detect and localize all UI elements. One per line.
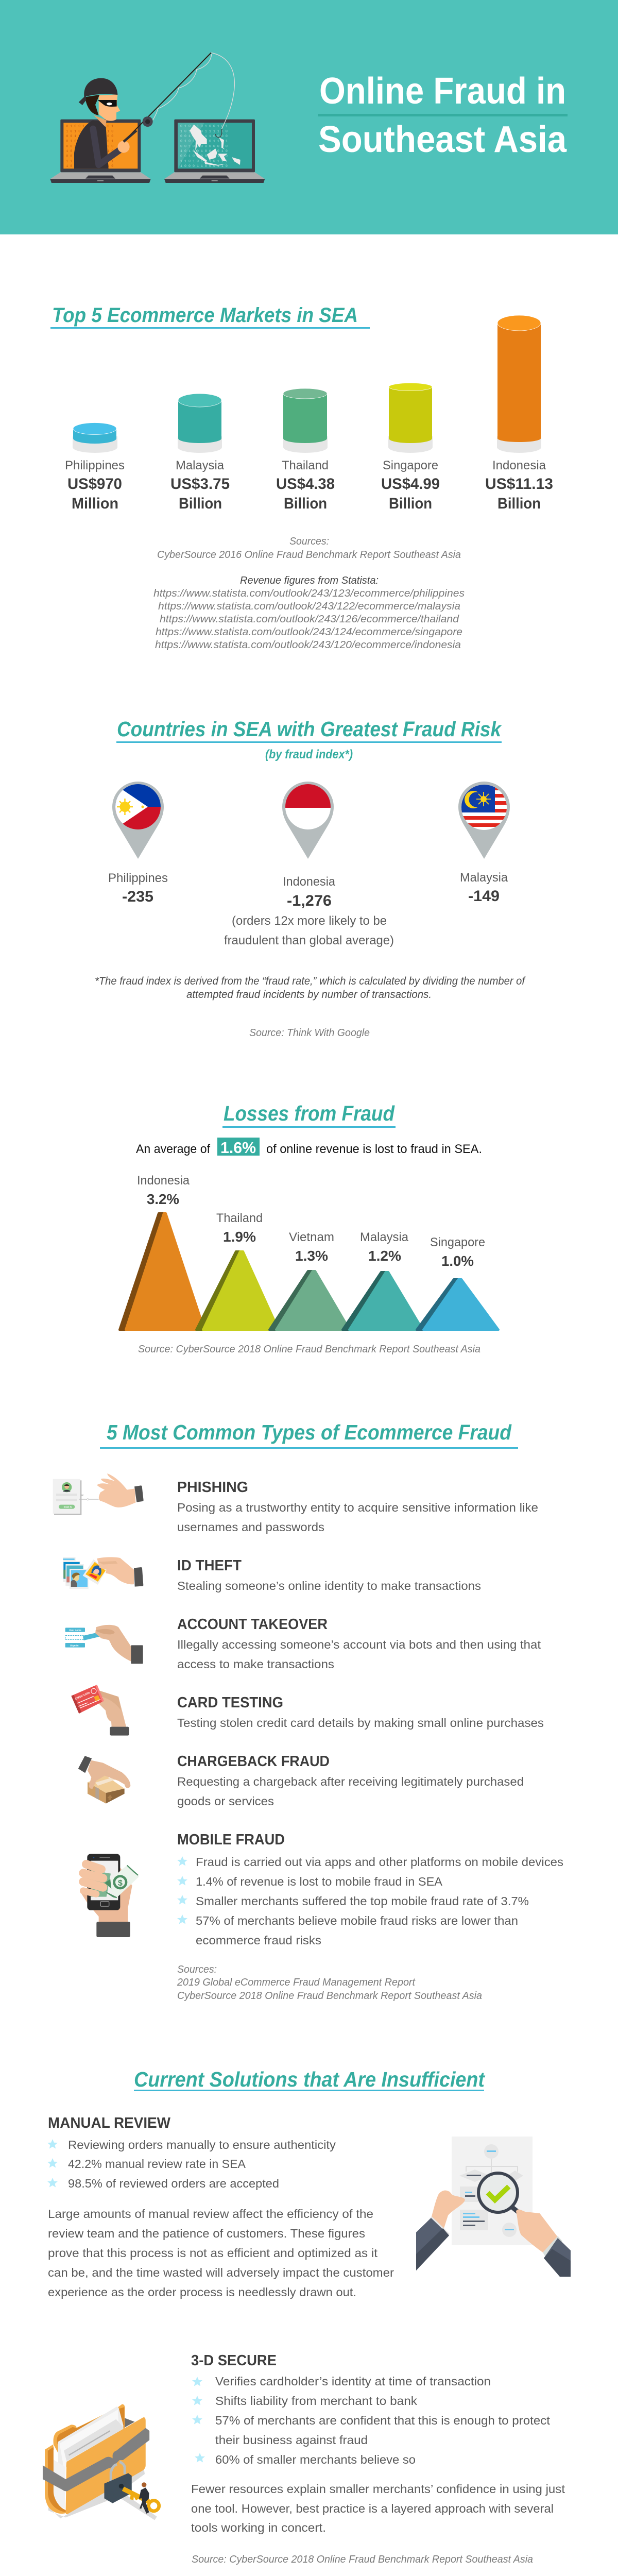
bar: Indonesia [497, 315, 541, 453]
callout: average loss: of online revenue is lost to fraud in SEA. [266, 1142, 482, 1156]
heading: Countries in SEA with Greatest Fraud Risk [117, 717, 502, 741]
bullet list: Reviewing orders manually to ensure authenticity [68, 2138, 336, 2151]
source: Source: Think With Google [249, 1027, 370, 1039]
icon: account takeover hand and login form: Sign In [70, 1644, 79, 1647]
sources: Sources: [289, 536, 329, 547]
triangle: Vietnam [269, 1271, 350, 1330]
chart labels: Billion [389, 495, 432, 512]
text: 3-D secure: 3-D SECURE [191, 2352, 277, 2369]
icon: mobile fraud hand, phone and banknote: $ [118, 1879, 123, 1888]
icon: right laptop: 0 0 1 0 0 0 1 1 0 0 0 0 [180, 134, 228, 138]
chart labels: Million [72, 495, 118, 512]
text: phishing: PHISHING [177, 1479, 248, 1496]
icon: right laptop: 1 0 0 0 1 1 0 0 0 1 1 0 [180, 164, 228, 168]
chart labels: Singapore [430, 1235, 485, 1249]
icon: card testing hand and credit card [71, 1685, 129, 1736]
text: 3-D secure [191, 2352, 565, 2565]
paragraph [48, 2207, 394, 2299]
section: countries with greatest fraud risk [95, 717, 526, 1039]
text: phishing: Posing as a trustworthy entity to acquire sensitive information like [177, 1501, 538, 1514]
chart labels: 1.2% [368, 1248, 401, 1264]
bullet list: their business against fraud [215, 2433, 368, 2447]
icon: right laptop: 0 1 0 1 0 0 1 0 1 1 0 1 [180, 139, 228, 143]
paragraph: one tool. However, best practice is a layered approach with several [191, 2502, 554, 2515]
text: manual review: MANUAL REVIEW [48, 2115, 171, 2131]
text: card testing [177, 1694, 544, 1730]
chart labels: Indonesia [492, 459, 546, 472]
icon: account takeover hand and login form [65, 1625, 143, 1664]
icon: left laptop: 0 1 0 1 0 0 0 0 1 1 0 1 [66, 139, 113, 143]
sources: https://www.statista.com/outlook/243/123/ecommerce/philippines [153, 588, 465, 599]
icon: account takeover hand and login form: User name [69, 1629, 81, 1631]
section: top 5 ecommerce markets [50, 304, 553, 651]
icon: right laptop: 0 0 1 0 0 0 0 0 0 0 0 0 [180, 144, 228, 148]
heading: Top 5 Ecommerce Markets in SEA [52, 304, 358, 327]
icon: id theft hand and cards [63, 1557, 143, 1589]
bullet list: Shifts liability from merchant to bank [215, 2394, 418, 2408]
bullet list [47, 2138, 336, 2190]
sources [153, 536, 465, 651]
sources [177, 1964, 482, 2002]
labels: fraud index: -1,276 [287, 892, 332, 909]
text: chargeback fraud: CHARGEBACK FRAUD [177, 1753, 330, 1770]
text: manual review [47, 2115, 394, 2299]
heading: (by fraud index*) [265, 748, 353, 761]
paragraph: review team and the patience of customers. These figures [48, 2227, 365, 2240]
header banner [0, 0, 618, 234]
text: chargeback fraud: goods or services [177, 1794, 274, 1808]
bar chart: cylinders [73, 315, 541, 453]
icon: right laptop: 0 1 0 0 1 0 1 0 0 1 0 1 [180, 124, 228, 128]
paragraph: can be, and the time wasted will adversely impact the customer [48, 2266, 394, 2279]
text: account takeover [177, 1616, 541, 1671]
text: mobile fraud: MOBILE FRAUD [177, 1832, 285, 1848]
text: id theft: Stealing someone’s online identity to make transactions [177, 1579, 481, 1592]
bullet list [192, 2375, 551, 2466]
text: mobile fraud [177, 1832, 563, 1947]
icon: Malaysia pin [458, 782, 510, 859]
section: losses from fraud [119, 1101, 499, 1355]
section: common types of fraud [53, 1420, 563, 2002]
callout: average loss [136, 1138, 482, 1157]
text: card testing: Testing stolen credit card details by making small online purchases [177, 1716, 544, 1730]
sources: https://www.statista.com/outlook/243/120/ecommerce/indonesia [155, 639, 461, 651]
icon: right laptop: 1 0 1 1 1 0 1 1 1 1 1 0 [180, 129, 228, 133]
sources: Sources: [177, 1964, 217, 1975]
triangle: Thailand [196, 1251, 279, 1330]
bullet list: 60% of smaller merchants believe so [215, 2453, 416, 2466]
text: chargeback fraud [177, 1753, 524, 1808]
chart labels: Indonesia [137, 1174, 190, 1188]
icon: right laptop: 0 0 1 0 0 0 0 0 1 1 0 0 [180, 154, 228, 158]
chart labels: Billion [497, 495, 541, 512]
chart labels: Vietnam [289, 1230, 334, 1244]
section: current solutions [43, 2067, 571, 2565]
labels: fraud index: fraudulent than global average) [224, 934, 394, 947]
text: phishing: usernames and passwords [177, 1520, 324, 1534]
icon: right laptop [164, 120, 265, 183]
chart labels: Billion [284, 495, 327, 512]
bullet list: Verifies cardholder’s identity at time of transaction [215, 2375, 491, 2388]
bar: Philippines [73, 422, 117, 453]
illustration: fraudster fishing through laptops [50, 53, 265, 183]
sources: CyberSource 2018 Online Fraud Benchmark Report Southeast Asia [177, 1990, 482, 2002]
text: id theft [177, 1557, 481, 1592]
icon: left laptop: 1 0 1 0 1 1 1 1 1 1 1 0 [66, 129, 113, 133]
bullet list: 42.2% manual review rate in SEA [68, 2157, 246, 2171]
heading: Losses from Fraud [224, 1101, 395, 1125]
chart labels: 1.3% [295, 1248, 328, 1264]
bullet list: 57% of merchants believe mobile fraud risks are lower than [196, 1914, 518, 1927]
sources: https://www.statista.com/outlook/243/126/ecommerce/thailand [160, 614, 459, 625]
icon: left laptop: 1 0 1 0 0 0 0 0 0 1 1 0 [66, 149, 113, 153]
callout: average loss: 1.6% [220, 1139, 256, 1157]
labels: fraud index: -235 [122, 888, 153, 905]
bullet list: 1.4% of revenue is lost to mobile fraud in SEA [196, 1875, 443, 1888]
paragraph: experience as the order process is needlessly drawn out. [48, 2285, 356, 2299]
sources: CyberSource 2016 Online Fraud Benchmark Report Southeast Asia [157, 549, 461, 561]
bar: Thailand [283, 388, 328, 453]
labels: fraud index: Malaysia [460, 871, 508, 885]
heading: Current Solutions that Are Insufficient [134, 2067, 486, 2091]
icon: left laptop: 0 1 0 0 1 0 0 1 0 1 0 1 [66, 124, 113, 128]
chart labels: US$4.99 [381, 476, 440, 493]
paragraph [191, 2482, 565, 2534]
heading: 5 Most Common Types of Ecommerce Fraud [107, 1420, 512, 1444]
map of Southeast Asia [190, 125, 241, 166]
text: card testing: CARD TESTING [177, 1694, 283, 1711]
icon: right laptop: 1 1 0 1 0 1 0 1 0 1 1 1 [180, 159, 228, 163]
bullet list: Smaller merchants suffered the top mobile fraud rate of 3.7% [196, 1894, 529, 1908]
icon: thief [74, 78, 130, 168]
icon: hands holding flowchart and magnifier [416, 2137, 571, 2277]
bullet list: 98.5% of reviewed orders are accepted [68, 2177, 279, 2190]
icon: mobile fraud hand, phone and banknote [81, 1854, 139, 1937]
icon: left laptop: 1 1 0 0 1 0 0 1 0 1 1 1 [66, 159, 113, 163]
chart labels: Malaysia [176, 459, 225, 472]
sources: 2019 Global eCommerce Fraud Management Report [177, 1977, 416, 1988]
icon: left laptop: 0 0 0 1 1 0 0 0 1 1 0 0 [66, 154, 113, 158]
icon: phishing hand and login page [53, 1473, 144, 1515]
bar: Malaysia [178, 394, 222, 453]
chart labels: 1.0% [441, 1253, 474, 1269]
heading [116, 717, 502, 761]
callout: average loss: An average of [136, 1142, 210, 1156]
chart labels: Thailand [282, 459, 329, 472]
icon: chargeback hand and parcel [79, 1756, 130, 1804]
text: chargeback fraud: Requesting a chargeback after receiving legitimately purchased [177, 1775, 524, 1788]
chart labels [65, 459, 553, 512]
labels: fraud index [108, 871, 508, 947]
chart labels: Singapore [383, 459, 438, 472]
icon: locked folder with key [43, 2404, 159, 2520]
chart labels: Billion [179, 495, 222, 512]
bullet list: 57% of merchants are confident that this is enough to protect [215, 2414, 551, 2427]
labels: fraud index: -149 [468, 888, 500, 905]
chart labels: Malaysia [360, 1230, 409, 1244]
paragraph: tools working in concert. [191, 2521, 326, 2534]
icon: Philippines pin [112, 782, 164, 859]
labels: fraud index: Indonesia [283, 875, 336, 889]
text: account takeover: access to make transactions [177, 1657, 334, 1671]
text: phishing [177, 1479, 538, 1534]
chart: triangles of revenue lost [119, 1213, 499, 1330]
sources: https://www.statista.com/outlook/243/124/ecommerce/singapore [156, 626, 462, 638]
icon: fishing rod and line [124, 53, 234, 142]
paragraph: prove that this process is not as efficient and optimized as it [48, 2246, 378, 2260]
labels: fraud index: Philippines [108, 871, 168, 885]
chart labels: 3.2% [147, 1191, 179, 1207]
icon: left laptop: 0 0 1 0 1 0 0 0 1 0 0 0 [66, 144, 113, 148]
icon: left laptop: 1 0 0 1 1 0 0 0 0 1 1 0 [66, 164, 113, 168]
chart labels: US$970 [67, 476, 122, 493]
title [318, 71, 568, 160]
icon: left laptop [50, 120, 151, 183]
triangle: Indonesia [119, 1213, 204, 1330]
chart labels: Philippines [65, 459, 125, 472]
triangle: Malaysia [342, 1272, 423, 1330]
icon: left laptop: 0 0 1 1 0 0 1 1 0 0 0 0 [66, 134, 113, 138]
note: fraud index definition [95, 975, 526, 1001]
chart labels: US$4.38 [276, 476, 335, 493]
bullet list [177, 1855, 563, 1947]
bullet list: ecommerce fraud risks [196, 1934, 321, 1947]
icon: card testing hand and credit card: CREDIT CARD [75, 1691, 91, 1701]
note: fraud index definition: attempted fraud incidents by number of transactions. [186, 988, 432, 1001]
sources: https://www.statista.com/outlook/243/122/ecommerce/malaysia [158, 601, 460, 612]
bullet list: Fraud is carried out via apps and other platforms on mobile devices [196, 1855, 563, 1869]
chart labels: US$3.75 [170, 476, 230, 493]
text: account takeover: Illegally accessing someone’s account via bots and then using that [177, 1638, 541, 1651]
title: Southeast Asia [318, 119, 567, 160]
chart labels [137, 1174, 485, 1269]
chart labels: 1.9% [223, 1229, 256, 1245]
text: account takeover: ACCOUNT TAKEOVER [177, 1616, 328, 1633]
paragraph: Fewer resources explain smaller merchants’ confidence in using just [191, 2482, 565, 2496]
triangle: Singapore [417, 1279, 499, 1330]
chart labels: US$11.13 [485, 476, 553, 493]
icon: Indonesia pin [282, 782, 334, 859]
chart labels: Thailand [216, 1211, 263, 1225]
icon: phishing hand and login page: SIGN IN [64, 1505, 72, 1508]
source: Source: CyberSource 2018 Online Fraud Benchmark Report Southeast Asia [138, 1344, 480, 1355]
text: id theft: ID THEFT [177, 1557, 242, 1574]
source: Source: CyberSource 2018 Online Fraud Benchmark Report Southeast Asia [192, 2554, 533, 2565]
bar: Singapore [388, 383, 433, 453]
title: Online Fraud in [319, 71, 566, 112]
sources: Revenue figures from Statista: [240, 575, 379, 586]
labels: fraud index: (orders 12x more likely to be [232, 914, 387, 928]
icon: right laptop: 1 0 1 0 0 1 0 0 1 0 1 0 [180, 149, 228, 153]
note: fraud index definition: *The fraud index is derived from the “fraud rate,” which is calculated by dividing the number of [95, 975, 526, 987]
paragraph: Large amounts of manual review affect the efficiency of the [48, 2207, 373, 2221]
